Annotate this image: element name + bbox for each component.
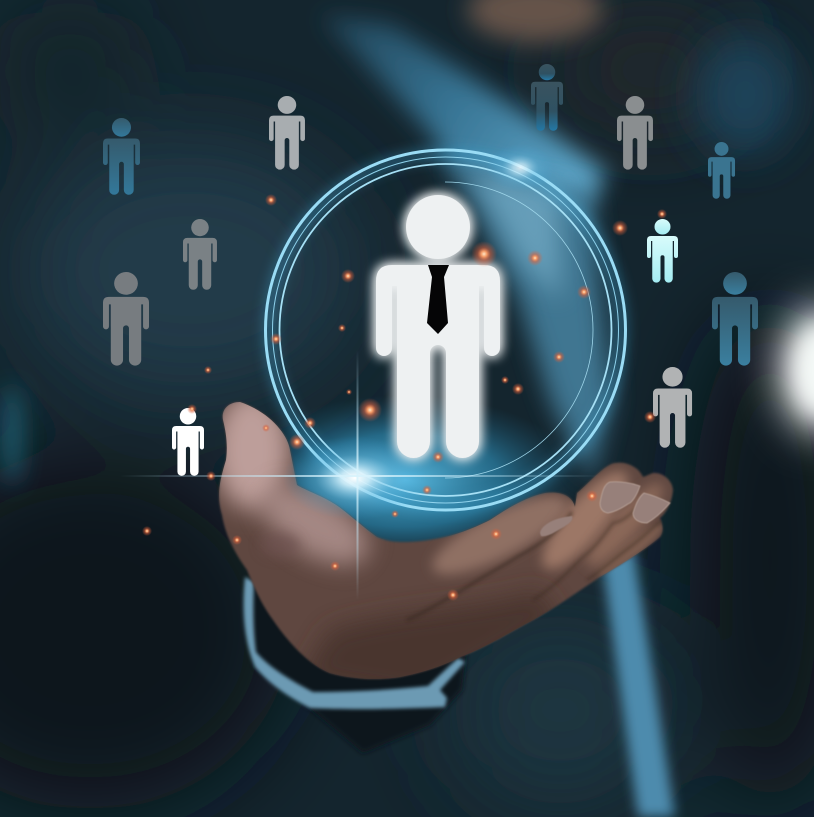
person: left inner grey xyxy=(183,219,217,290)
tie upper xyxy=(452,165,612,480)
teal blur left xyxy=(4,385,20,485)
palm crease xyxy=(276,530,301,550)
person: right large blue xyxy=(712,272,758,366)
index finger xyxy=(428,492,571,580)
blue blob top right xyxy=(695,35,795,155)
middle finger xyxy=(536,466,633,574)
person: top grey xyxy=(269,96,305,170)
surrounding person icons xyxy=(103,64,758,476)
person: top left blue xyxy=(103,118,140,195)
glowing ring xyxy=(266,150,626,510)
person: top dark xyxy=(531,64,563,131)
skin at the top xyxy=(467,0,603,42)
person: right light cyan xyxy=(647,219,678,283)
palm highlight xyxy=(254,477,381,576)
tie lower xyxy=(602,545,675,817)
person: far right small blue xyxy=(708,142,735,199)
finger separators xyxy=(407,505,662,620)
orange sparks xyxy=(142,194,667,601)
central person icon xyxy=(376,195,500,458)
white blur right xyxy=(782,308,814,432)
person: upper right grey xyxy=(617,96,653,170)
little finger xyxy=(599,524,662,577)
person: lower right grey xyxy=(653,367,692,448)
sleeve and cuff xyxy=(244,577,466,753)
person: left large grey xyxy=(103,272,149,366)
person: lower left white xyxy=(172,408,204,476)
icon: black tie xyxy=(427,265,449,334)
blue glow under the ring xyxy=(230,395,580,565)
ring finger xyxy=(584,480,667,570)
fingernails xyxy=(540,482,670,536)
collar xyxy=(320,15,607,207)
lower palm shadow xyxy=(310,590,553,679)
thumb highlight xyxy=(214,390,290,510)
light flares xyxy=(120,144,600,600)
hand xyxy=(218,401,674,680)
